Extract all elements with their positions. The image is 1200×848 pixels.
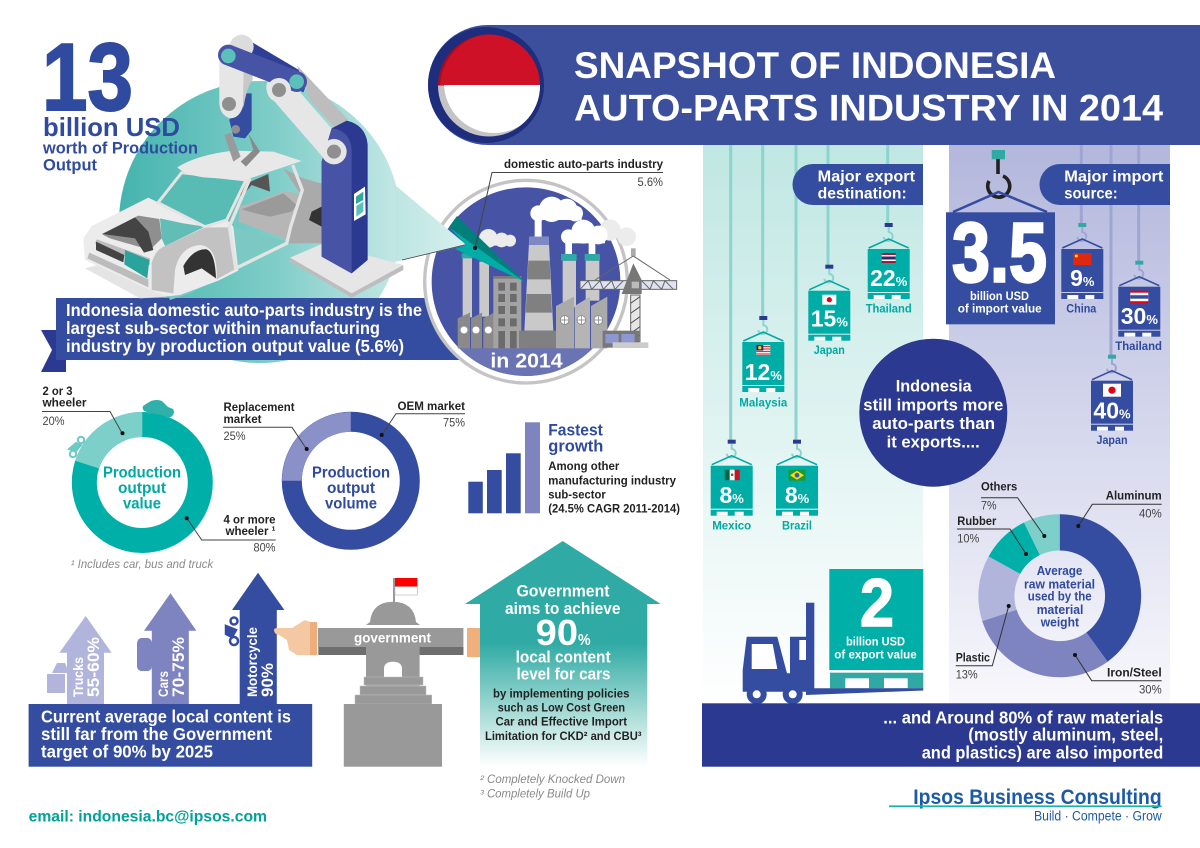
callout: 4 or more wheeler 80%: 80% [254,542,276,554]
callout: others 7% [981,480,1046,538]
icon: car silhouette [137,638,152,671]
icon: forklift [743,603,923,704]
tag: Japan 40%: 40% [1093,397,1131,423]
callout: replacement market 25%: market [224,412,262,426]
banner text: largest sub-sector within manufacturing [66,318,380,338]
tag: Japan 15% [808,265,850,357]
center label: weight [1040,616,1080,630]
tag: Mexico 8%: Mexico [712,518,751,532]
crane [580,248,677,348]
callout circle: imports more than exports: auto-parts than [872,415,995,433]
tag: Malaysia 12%: Malaysia [739,396,788,410]
export ropes [731,145,888,441]
tag: Japan 15%: Japan [814,343,845,357]
callout: rubber 10%: Rubber [957,514,997,528]
illustration: government building [318,578,463,767]
import value crate: 3.5 billion USD: of import value [958,302,1042,316]
center label: Production [312,464,390,482]
export value crate: 2 billion USD: 2 [860,565,894,641]
text block: fastest growth: growth [548,437,603,456]
logo: Ipsos Business Consulting [889,786,1162,824]
banner text: Indonesia domestic auto-parts industry is the [66,300,422,320]
hood opening [102,216,162,250]
tag: Brazil 8%: 8% [785,482,810,508]
slice: iron/steel 30% [982,610,1108,677]
center label: output [327,480,376,497]
tag: Thailand 22%: 22% [870,265,908,291]
heading: major import source: Major import [1064,169,1163,186]
house arrow: government target [465,541,661,767]
panel: local content vs target: still far from the Government [41,724,272,744]
wheel arch [183,249,216,278]
callout: domestic auto-parts industry 5.6% [473,157,663,250]
footnotes 2 and 3 [480,774,625,801]
callout: 4 or more wheeler 80% [185,512,276,554]
projection beam [395,185,466,262]
right sheds [556,297,607,348]
tag: Brazil 8% [776,440,818,532]
heading: major import source: source: [1064,186,1118,203]
text block: fastest growth: (24.5% CAGR 2011-2014) [548,501,680,515]
bottom banner: raw materials also imported: and plastics) are also imported [922,742,1163,762]
policy text: by implementing policies [493,686,630,700]
policy text: Limitation for CKD² and CBU³ [485,729,642,743]
policy text [485,686,642,743]
arrow: cars [144,593,196,704]
gripper fingers [224,133,241,162]
export value crate: 2 billion USD: of export value [834,647,917,661]
footnotes 2 and 3: ² Completely Knocked Down [480,774,625,786]
target text: % [578,632,591,649]
teal pointer needle [449,216,525,282]
callout circle: imports more than exports: Indonesia [896,378,973,396]
bar chart: fastest growth [468,422,540,513]
callout: iron/steel 30% [1073,653,1162,696]
left sheds [458,313,494,348]
callout: aluminum 40% [1076,488,1162,528]
tag: Thailand 30% [1115,261,1162,353]
donut chart: production output value [69,400,200,540]
callout circle: imports more than exports: still imports more [863,397,1003,415]
ground shadow [85,263,167,298]
text block: fastest growth: Among other [548,459,620,473]
callout: OEM market 75%: 75% [443,418,465,430]
callout: 4 or more wheeler 80%: wheeler ¹ [225,524,276,538]
side panel [152,227,235,293]
panel: import backdrop [949,145,1170,705]
target text: local content [516,648,611,667]
tag: Japan 40%: Japan [1096,433,1128,447]
icon: truck [47,663,67,693]
headline: 13 billion USD: worth of Production [42,138,198,158]
import value crate: 3.5 billion USD: 3.5 [952,206,1047,300]
donut chart: raw material [978,514,1141,677]
logo: Ipsos Business Consulting: Build · Compete · Grow [1034,808,1162,824]
gripper wrist [229,93,252,138]
center label: used by the [1028,590,1092,604]
icon: right pointing hand [467,628,498,657]
roof [177,151,302,180]
tag: China 9%: 9% [1070,265,1095,291]
callout: replacement market 25% [223,400,309,451]
headline: 13 billion USD: billion USD [43,112,180,142]
callout: 2 or 3 wheeler 20%: 20% [42,416,64,428]
callout: iron/steel 30%: Iron/Steel [1107,666,1162,680]
headline: 13 billion USD [42,24,198,174]
tag: Mexico 8%: 8% [720,482,744,508]
interior [238,192,301,239]
center label [103,464,181,512]
callout: aluminum 40%: 40% [1139,508,1162,520]
center label: volume [325,496,377,512]
pallet [830,673,923,688]
logo: Ipsos Business Consulting: Ipsos Business Consulting [913,786,1162,809]
footnotes 2 and 3: ³ Completely Build Up [480,789,591,801]
banner: largest sub-sector [41,298,466,372]
export value crate: 2 billion USD: billion USD [846,635,905,649]
illustration: government building: government [354,630,431,646]
office building [493,276,556,348]
heading: major import source [1039,164,1170,205]
see-through floor [157,227,288,300]
email: email: indonesia.bc@ipsos.com [29,809,267,826]
center label: value [123,496,161,512]
robot arm [219,35,403,298]
callout circle: imports more than exports [859,339,1007,487]
callout: plastic 13%: 13% [956,669,978,681]
callout circle: imports more than exports: it exports.... [887,433,980,451]
slice: plastic 13% [978,556,1020,621]
tag: Japan 15%: 15% [811,306,848,332]
callout: others 7%: 7% [981,500,996,512]
ribbon tail [41,330,66,372]
target text: level for cars [516,664,610,683]
text block: fastest growth: sub-sector [548,487,606,501]
callout: rubber 10% [957,514,1028,556]
heading: major export destination: destination: [818,186,907,203]
headline: 13 billion USD: Output [43,156,97,174]
title text line 2: AUTO-PARTS INDUSTRY IN 2014 [574,88,1163,128]
panel: export backdrop [703,145,923,705]
icon: left pointing hand [274,620,317,655]
lower white arm [297,65,348,130]
base plate [290,243,403,293]
target text: aims to achieve [505,599,620,618]
tag: Malaysia 12%: 12% [745,359,782,385]
heading: major export destination: Major export [818,169,915,186]
banner text [66,300,422,356]
arrow: cars: Cars [155,671,171,697]
callout: plastic 13% [956,604,1011,681]
export value crate: 2 billion USD [829,565,923,688]
factory roundel [420,180,677,392]
arrow: motorcycle [232,573,284,704]
policy text: such as Low Cost Green [498,701,625,715]
arrow: trucks: 55-60% [84,637,103,697]
tag: Thailand 30%: Thailand [1115,339,1162,353]
rear blue arm [240,35,308,92]
heading: major export destination [792,164,923,205]
windshield [158,173,246,227]
callout: replacement market 25%: Replacement [224,400,294,414]
banner pill [428,25,1200,145]
tag: Malaysia 12% [739,316,788,410]
callout: 2 or 3 wheeler 20% [42,384,124,435]
tag: China 9% [1061,223,1103,315]
center label: output [118,480,167,497]
banner text: industry by production output value (5.6%) [66,336,404,356]
slice: rubber 10% [989,522,1040,574]
tag: Thailand 22%: Thailand [866,302,912,316]
center label: material [1037,603,1083,617]
tag: Mexico 8% [711,440,753,532]
door frames [229,165,302,268]
import value crate: 3.5 billion USD [946,150,1055,324]
arrow: motorcycle: 90% [258,663,277,697]
panel: local content vs target: Current average local content is [41,707,291,727]
callout: iron/steel 30%: 30% [1139,684,1162,696]
policy text: Car and Effective Import [496,715,627,729]
arrow: motorcycle: Motorcycle [244,627,260,697]
import value crate: 3.5 billion USD: billion USD [970,289,1029,303]
target text [505,582,620,683]
far side [283,168,323,243]
in 2014: in 2014 [490,349,563,372]
callout: 2 or 3 wheeler 20%: wheeler [42,396,87,410]
vertical white arm [243,58,253,108]
icon: car [143,400,174,418]
callout: aluminum 40%: Aluminum [1106,488,1162,502]
callout: rubber 10%: 10% [957,533,979,545]
icon: motorbike [69,437,84,457]
center label [312,464,390,512]
column [322,121,368,273]
title text: SNAPSHOT OF INDONESIA [574,45,1056,86]
outer shell [83,198,238,297]
footnote 1: ¹ Includes car, bus and truck [71,559,214,571]
clouds and smoke [473,197,636,255]
callout: replacement market 25%: 25% [224,431,246,443]
callout: plastic 13%: Plastic [956,651,990,665]
tag: Thailand 22% [866,223,912,316]
callout: OEM market 75%: OEM market [398,399,465,413]
slice: aluminum 40% [1060,514,1141,662]
callout: domestic auto-parts industry 5.6%: 5.6% [638,175,663,189]
center label [1024,564,1095,630]
callout: OEM market 75% [380,399,465,437]
import ropes [1081,145,1139,356]
bottom banner: raw materials also imported: (mostly aluminum, steel, [968,725,1163,745]
text block: fastest growth: Fastest [548,421,603,440]
tag: Brazil 8%: Brazil [782,518,812,532]
car body shell [83,151,323,300]
hook [988,150,1010,197]
icon: Indonesia flag badge [428,25,550,146]
icon: motorcycle [226,618,238,645]
headline: 13 billion USD: 13 [42,24,133,131]
callout: others 7%: Others [981,480,1018,494]
arrow: cars: 70-75% [169,637,188,697]
chimneys [462,237,600,331]
upper blue arm [228,55,297,82]
lower fascia [95,239,150,265]
control panel [354,187,366,221]
tag: Japan 40% [1091,355,1133,447]
arrow: trucks: Trucks [70,657,86,697]
target text: Government [516,582,610,601]
text block: fastest growth: manufacturing industry [548,473,676,487]
center label: Average [1037,564,1082,578]
callout: 2 or 3 wheeler 20%: 2 or 3 [42,384,73,398]
bottom banner: raw materials also imported: ... and Around 80% of raw materials [883,707,1164,727]
callout: 4 or more wheeler 80%: 4 or more [224,512,276,526]
arrow: trucks [59,616,112,704]
tag: Thailand 30%: 30% [1121,303,1158,329]
panel: local content vs target: target of 90% by 2025 [41,742,213,762]
teal backdrop circle [119,81,401,363]
title banner [428,25,1200,146]
center label: Production [103,464,181,482]
tag: China 9%: China [1066,301,1097,315]
panel: local content vs target [29,704,312,767]
text block: fastest growth [548,421,680,515]
center label: raw material [1024,577,1095,591]
target text: 90 [536,612,578,653]
callout: domestic auto-parts industry 5.6%: domestic auto-parts industry [504,157,663,171]
slice: others 7% [1024,514,1060,555]
donut chart: production output volume [282,412,410,540]
bottom banner: raw materials also imported [702,703,1200,767]
